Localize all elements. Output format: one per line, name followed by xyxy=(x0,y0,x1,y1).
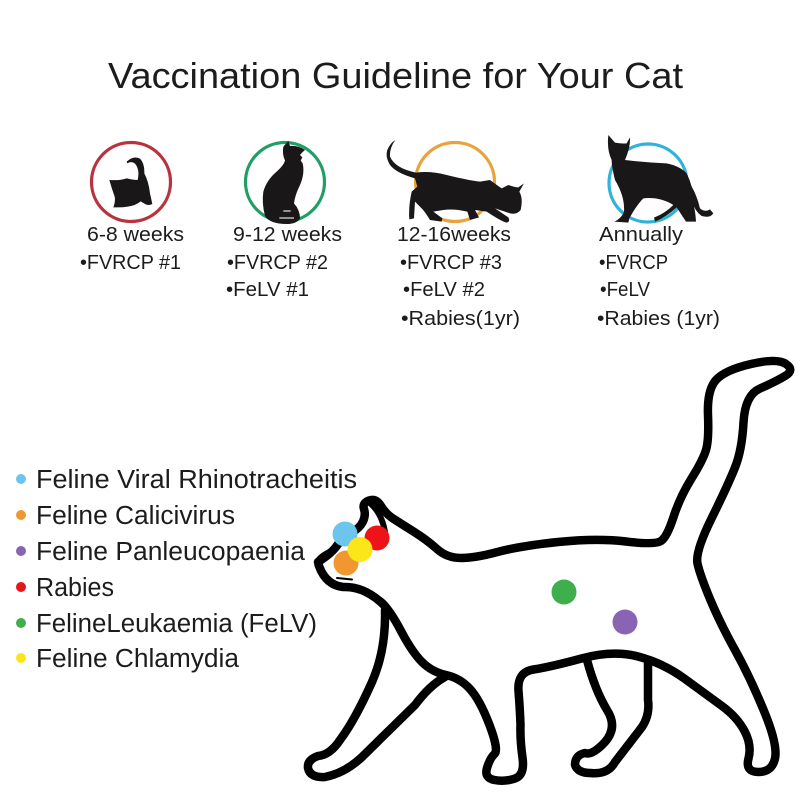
panel: annually xyxy=(597,135,720,330)
marker: calicivirus xyxy=(334,550,358,576)
list item: •FVRCP xyxy=(599,251,668,274)
list item: •FeLV #2 xyxy=(403,278,485,301)
icon: standing cat silhouette xyxy=(608,135,713,223)
icon: kitten silhouette xyxy=(109,158,152,207)
icon: red circle xyxy=(92,142,170,222)
cat outline diagram xyxy=(308,361,790,781)
marker: rabies xyxy=(364,526,390,550)
panel: 6-8 weeks xyxy=(80,142,184,274)
legend item: leukaemia: FelineLeukaemia (FeLV) xyxy=(36,610,317,638)
legend item: chlamydia: Feline Chlamydia xyxy=(36,645,240,673)
legend xyxy=(16,466,357,673)
cat body outline xyxy=(308,361,790,781)
icon: green circle xyxy=(246,142,324,222)
heading: 6-8 weeks: 6-8 weeks xyxy=(87,223,184,246)
icon: orange circle xyxy=(416,142,494,222)
marker: chlamydia xyxy=(348,537,372,562)
icon: blue circle xyxy=(609,144,687,222)
list item: •FVRCP #2 xyxy=(227,251,328,274)
list item: •Rabies (1yr) xyxy=(597,307,720,330)
marker: leukaemia xyxy=(552,580,576,604)
legend item: rhinotracheitis: Feline Viral Rhinotracheitis xyxy=(36,466,357,494)
list item: •Rabies(1yr) xyxy=(401,307,520,330)
list item: •FVRCP #3 xyxy=(400,251,502,274)
title: Vaccination Guideline for Your Cat xyxy=(108,55,683,96)
heading: 12-16weeks: 12-16weeks xyxy=(397,223,511,246)
marker: panleucopaenia xyxy=(612,610,638,634)
legend item: calicivirus: Feline Calicivirus xyxy=(36,502,235,530)
marker: rhinotracheitis xyxy=(332,522,358,546)
legend item: rabies: Rabies xyxy=(36,574,114,602)
icon: crouching cat silhouette xyxy=(387,140,524,223)
panel: 9-12 weeks xyxy=(226,141,342,301)
legend item: panleucopaenia: Feline Panleucopaenia xyxy=(36,538,306,566)
icon: sitting cat silhouette xyxy=(263,141,305,224)
panel: 12-16 weeks xyxy=(387,140,524,330)
heading: annually: Annually xyxy=(599,223,684,246)
heading: 9-12 weeks: 9-12 weeks xyxy=(233,223,342,246)
list item: •FeLV xyxy=(600,278,650,301)
list item: •FeLV #1 xyxy=(226,278,309,301)
list item: •FVRCP #1 xyxy=(80,251,181,274)
